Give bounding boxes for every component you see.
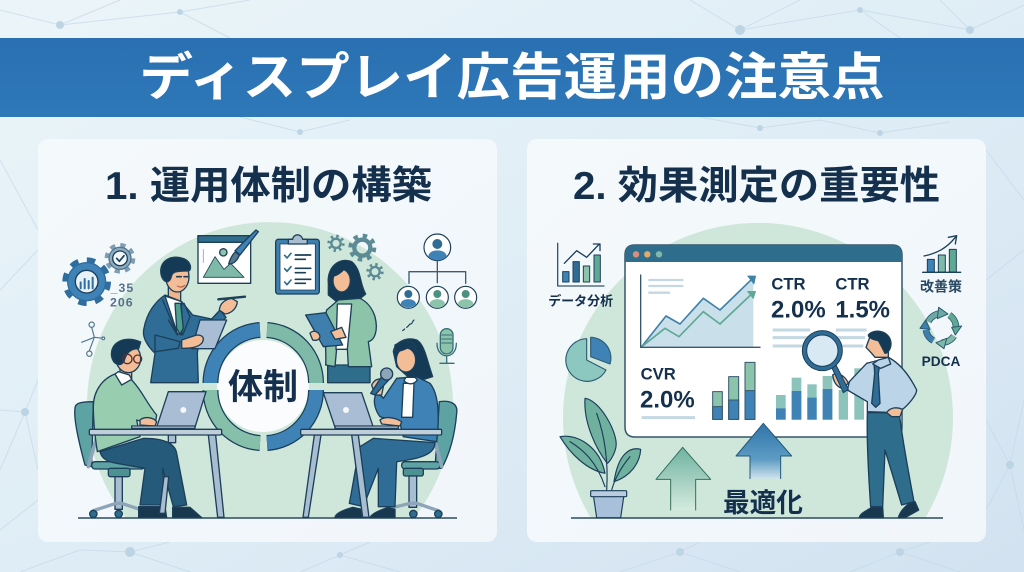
left illustrations: 206 bbox=[110, 296, 134, 310]
bar chart large bbox=[776, 368, 864, 420]
metric CVR: CVR bbox=[641, 364, 676, 383]
pie chart bbox=[566, 337, 611, 381]
heading 2: 2. 効果測定の重要性 bbox=[573, 165, 940, 208]
plant bbox=[560, 398, 641, 518]
man sitting bbox=[93, 339, 202, 518]
window buttons bbox=[633, 251, 662, 258]
man standing bbox=[143, 257, 245, 383]
bar chart small bbox=[713, 362, 755, 419]
numbers: _35 bbox=[110, 281, 134, 295]
ring diagram 体制: 体制 bbox=[228, 368, 298, 407]
metric CTR 2.0%: 2.0% bbox=[771, 297, 826, 324]
metric CVR bbox=[640, 364, 695, 418]
chair: left bbox=[75, 402, 145, 518]
metric CTR 1.5% bbox=[835, 274, 890, 346]
icon: PDCA cycle bbox=[920, 307, 962, 369]
man with magnifier bbox=[833, 331, 919, 518]
panel: 運用体制の構築 bbox=[38, 139, 497, 542]
metric CVR: 2.0% bbox=[640, 386, 695, 413]
icon: improvement: 改善策 bbox=[920, 278, 962, 294]
metric CTR 2.0% bbox=[771, 274, 826, 346]
left illustrations bbox=[66, 230, 258, 518]
green blob bbox=[563, 223, 953, 518]
icon: molecule bbox=[82, 322, 105, 356]
org chart bbox=[397, 234, 477, 308]
heading 1: 1. 運用体制の構築 bbox=[105, 165, 432, 208]
arrow: green up bbox=[656, 447, 711, 510]
label 最適化: 最適化 bbox=[723, 488, 803, 518]
title: ディスプレイ広告運用の注意点 bbox=[140, 49, 884, 106]
panel: 効果測定の重要性 bbox=[527, 139, 986, 542]
icon: clipboard bbox=[276, 235, 319, 294]
icon: magnifier bbox=[802, 331, 848, 393]
ring diagram 体制 bbox=[210, 330, 316, 443]
icon: image window with brush bbox=[198, 230, 258, 283]
icon: microphone bbox=[437, 329, 456, 363]
laptop: right bbox=[323, 393, 398, 428]
icon: PDCA cycle: PDCA bbox=[922, 354, 960, 369]
desk: right bbox=[301, 429, 442, 517]
green blob bbox=[87, 222, 453, 518]
icon: outlined gears bbox=[329, 236, 382, 279]
arrow: blue up bbox=[736, 423, 792, 479]
chair: right bbox=[393, 401, 457, 518]
ground line bbox=[571, 517, 943, 519]
icon: data analysis: データ分析 bbox=[548, 294, 613, 309]
browser window bbox=[625, 245, 902, 437]
ground line bbox=[78, 517, 457, 519]
line chart bbox=[641, 275, 760, 347]
desk: left bbox=[89, 429, 224, 517]
metric CTR 2.0%: CTR bbox=[771, 274, 806, 293]
laptop: left bbox=[132, 392, 206, 428]
icon: data analysis bbox=[548, 243, 613, 309]
icon: improvement bbox=[920, 236, 962, 294]
metric CTR 1.5%: CTR bbox=[835, 274, 870, 293]
icon: gears bbox=[66, 246, 133, 302]
woman sitting bbox=[335, 339, 438, 518]
woman standing bbox=[306, 260, 376, 383]
icon: squiggle bbox=[403, 320, 414, 331]
metric CTR 1.5%: 1.5% bbox=[835, 297, 890, 324]
title banner bbox=[0, 38, 1024, 117]
